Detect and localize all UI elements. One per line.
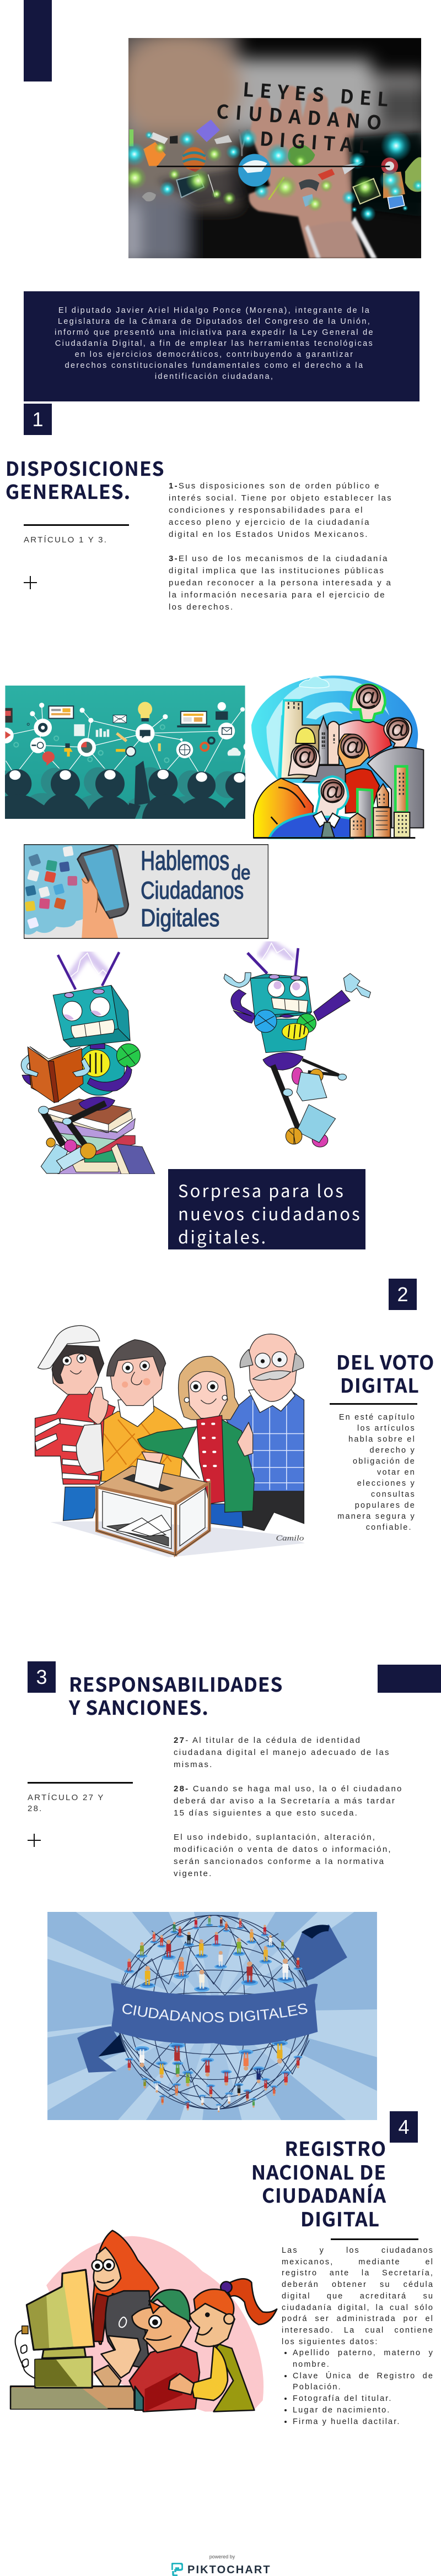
registro text: mexicanos, mediante el [282, 2258, 434, 2267]
disposiciones text: 3-El uso de los mecanismos de la ciudadanía [169, 554, 389, 563]
heading: registro nacional de ciudadania digital [243, 2137, 386, 2231]
hand [249, 86, 377, 258]
ribbon tails [77, 1925, 347, 2073]
signature: Camilo [276, 1534, 304, 1542]
right navy bar [378, 1665, 441, 1693]
heading: del voto digital [336, 1347, 434, 1399]
number 2: 2 [397, 1283, 408, 1306]
registro text: Las y los ciudadanos [282, 2246, 434, 2255]
number 1: 1 [32, 408, 44, 431]
plus icon [28, 1834, 41, 1847]
image: robot jumping [224, 942, 371, 1148]
rule [28, 1782, 133, 1783]
image: Hablemos de Ciudadanos Digitales banner: de [232, 861, 250, 884]
heading: registro nacional de ciudadania digital: CIUDADANÍA [262, 2181, 386, 2209]
image: Hablemos de Ciudadanos Digitales banner [24, 844, 268, 939]
boy with green cap [130, 2290, 200, 2411]
ribbon text: CIUDADANOS DIGITALES [122, 2003, 308, 2023]
del voto text: votar en [377, 1468, 416, 1477]
disposiciones text: condiciones y responsabilidades para el [169, 506, 364, 515]
phone and hand [77, 845, 128, 939]
old man [225, 1334, 304, 1530]
del voto text [337, 1413, 416, 1532]
network icons [5, 702, 241, 766]
ribbon band [111, 1983, 318, 2046]
boy with cap [35, 1325, 115, 1521]
registro text: Lugar de nacimiento. [293, 2406, 390, 2415]
heading: registro nacional de ciudadania digital: REGISTRO [284, 2134, 386, 2162]
del voto text: En esté capítulo [339, 1413, 416, 1422]
number 4 [390, 2111, 418, 2143]
article 27 text: 15 días siguientes a que esto suceda. [174, 1808, 358, 1818]
callout text: nuevos ciudadanos [178, 1200, 362, 1225]
article 27 text: mismas. [174, 1760, 213, 1769]
del voto text: confiable. [366, 1523, 412, 1532]
ballot box [97, 1459, 210, 1555]
del voto text: derecho y [370, 1446, 416, 1455]
registro text [282, 2245, 434, 2427]
intro text: identificación ciudadana, [155, 372, 274, 381]
article 27 text: ciudadana digital el manejo adecuado de las [174, 1748, 390, 1757]
girl with ponytail [169, 2279, 277, 2411]
man in yellow vest [76, 1340, 185, 1481]
del voto text: populares de [355, 1501, 416, 1510]
piktochart logo icon [171, 2563, 183, 2576]
registro text: Apellido paterno, materno y [293, 2349, 434, 2357]
callout text: digitales. [178, 1224, 267, 1248]
disposiciones text: digital implica que las instituciones públicas [169, 566, 385, 575]
piktochart wordmark: PIKTOCHART [187, 2564, 271, 2576]
intro text [55, 306, 374, 381]
number 4: 4 [398, 2116, 410, 2138]
image: people with @ heads and city [251, 675, 424, 839]
registro text: digital que acreditará su [282, 2292, 434, 2301]
title rule [157, 166, 390, 167]
number 3: 3 [36, 1666, 47, 1688]
del voto text: habla sobre el [348, 1435, 416, 1444]
disposiciones text: puedan reconocer a la persona interesada y a [169, 578, 392, 588]
registro text: ciudadanía digital, la cual sólo [282, 2303, 434, 2312]
at signs [293, 683, 410, 805]
people on the globe [124, 1916, 303, 2112]
article label: ARTÍCULO 1 Y 3. [24, 535, 107, 545]
heading: disposiciones generales [6, 454, 165, 505]
article 27 text: El uso indebido, suplantación, alteración, [174, 1833, 376, 1842]
nodes [0, 703, 251, 782]
image: Hablemos de Ciudadanos Digitales banner: Hablemos [141, 846, 229, 876]
at signs: @ [293, 743, 317, 770]
rule [24, 524, 129, 525]
heading: del voto digital: DEL VOTO [336, 1347, 434, 1376]
disposiciones text [169, 481, 392, 612]
disposiciones text: 1-Sus disposiciones son de orden público e [169, 481, 380, 491]
lattice sphere [117, 1915, 311, 2109]
number 2 [389, 1279, 417, 1310]
books stack [48, 1099, 155, 1174]
disposiciones text: los derechos. [169, 602, 234, 612]
image: ciudadanos digitales globe [47, 1912, 377, 2120]
callout: sorpresa [168, 1169, 365, 1249]
disposiciones text: acceso pleno y ejercicio de la ciudadanía [169, 518, 370, 527]
title text: CIUDADANO [216, 96, 389, 135]
article label [28, 1793, 105, 1813]
heading: disposiciones generales: DISPOSICIONES [6, 454, 165, 482]
title text: DIGITAL [259, 123, 377, 159]
top woman [339, 684, 391, 758]
intro text: Ciudadanía Digital, a fin de emplear las herramientas tecnológicas [55, 339, 374, 348]
registro text: Clave Única de Registro de [293, 2372, 434, 2381]
image: family voting at ballot box [34, 1325, 304, 1557]
disposiciones text: la información necesaria para el ejercicio de [169, 590, 386, 600]
desk and computer [10, 2270, 135, 2409]
image: Hablemos de Ciudadanos Digitales banner: Digitales [141, 904, 219, 932]
image: robot reading on books [21, 952, 155, 1174]
image: kids at computer [8, 2229, 278, 2413]
silhouettes [0, 767, 241, 846]
glowing lights [122, 129, 424, 222]
callout text [178, 1177, 362, 1248]
registro text: Fotografía del titular. [293, 2394, 392, 2403]
intro text: Legislatura de la Cámara de Diputados del Congreso de la Unión, [58, 317, 371, 326]
registro text: Población. [293, 2383, 342, 2392]
right man and grey panel [368, 718, 423, 828]
at signs: @ [356, 683, 380, 710]
del voto text: consultas [371, 1490, 416, 1499]
left man [254, 744, 320, 838]
intro text: informó que presentó una iniciativa para expedir la Ley General de [55, 328, 374, 337]
woman [138, 1356, 254, 1528]
woman with red hair [92, 2231, 159, 2387]
article 27 text: 28- Cuando se haga mal uso, la o él ciudadano [174, 1784, 403, 1794]
registro text: los siguientes datos: [282, 2338, 378, 2346]
registro text: interesado. La cual contiene [282, 2326, 434, 2335]
hero image: hand with digital objects and title [128, 38, 421, 258]
middle woman [338, 734, 379, 813]
registro text: Firma y huella dactilar. [293, 2417, 400, 2426]
del voto text: elecciones y [357, 1479, 416, 1488]
heading: registro nacional de ciudadania digital: DIGITAL [300, 2204, 380, 2232]
heading: responsabilidades y sanciones [68, 1670, 283, 1721]
at signs: @ [320, 778, 345, 805]
registro text: podrá ser administrada por el [282, 2314, 434, 2323]
heading: disposiciones generales: GENERALES. [6, 477, 131, 505]
title text [216, 74, 395, 159]
front man [269, 776, 353, 838]
at signs: @ [341, 733, 365, 759]
image: teal network of people [5, 686, 245, 819]
callout text: Sorpresa para los [178, 1177, 345, 1202]
title text: LEYES DEL [242, 74, 395, 112]
rule [331, 2238, 418, 2240]
heading: responsabilidades y sanciones: Y SANCIONES. [69, 1693, 209, 1721]
article 27 text: 27- Al titular de la cédula de identidad [174, 1736, 361, 1745]
registro text: nombre. [293, 2360, 330, 2369]
back buildings [280, 701, 346, 782]
disposiciones text: interés social. Tiene por objeto establecer las [169, 493, 392, 503]
sky dome [251, 676, 418, 789]
intro text: en los ejercicios democráticos, contribuyendo a garantizar [75, 350, 354, 359]
del voto text: obligación de [353, 1457, 416, 1466]
heading: registro nacional de ciudadania digital: NACIONAL DE [251, 2157, 386, 2186]
top decorative navy bar [24, 0, 52, 81]
article 27 text: modificación o venta de datos o información, [174, 1845, 392, 1854]
intro text: derechos constitucionales fundamentales como el derecho a la [65, 361, 364, 370]
at signs: @ [386, 716, 410, 742]
registro text: deberán obtener su cédula [282, 2280, 434, 2289]
rule [330, 1403, 417, 1404]
disposiciones text: digital en los Estados Unidos Mexicanos. [169, 530, 369, 539]
plus icon [24, 576, 37, 589]
article 27 text: deberá dar aviso a la Secretaría a más tardar [174, 1796, 396, 1806]
article 27 text: serán sancionados conforme a la normativa [174, 1857, 385, 1866]
robot body [21, 952, 140, 1173]
intro text: El diputado Javier Ariel Hidalgo Ponce (Morena), integrante de la [58, 306, 370, 315]
del voto text: manera segura y [337, 1512, 416, 1521]
article label: 28. [28, 1804, 43, 1813]
del voto text: los artículos [357, 1424, 416, 1433]
number 1 [24, 404, 52, 435]
article 27 text [174, 1736, 403, 1878]
number 3 [28, 1661, 56, 1693]
footer: powered by piktochart [165, 2552, 281, 2572]
heading: del voto digital: DIGITAL [340, 1371, 420, 1399]
registro text: registro ante la Secretaría, [282, 2269, 434, 2278]
heading: responsabilidades y sanciones: RESPONSABILIDADES [69, 1670, 283, 1698]
article label: ARTÍCULO 27 Y [28, 1793, 105, 1802]
powered by text: powered by [209, 2554, 235, 2559]
digital objects [130, 119, 421, 209]
intro panel [24, 291, 420, 401]
front buildings [350, 767, 410, 838]
article 27 text: vigente. [174, 1869, 213, 1878]
